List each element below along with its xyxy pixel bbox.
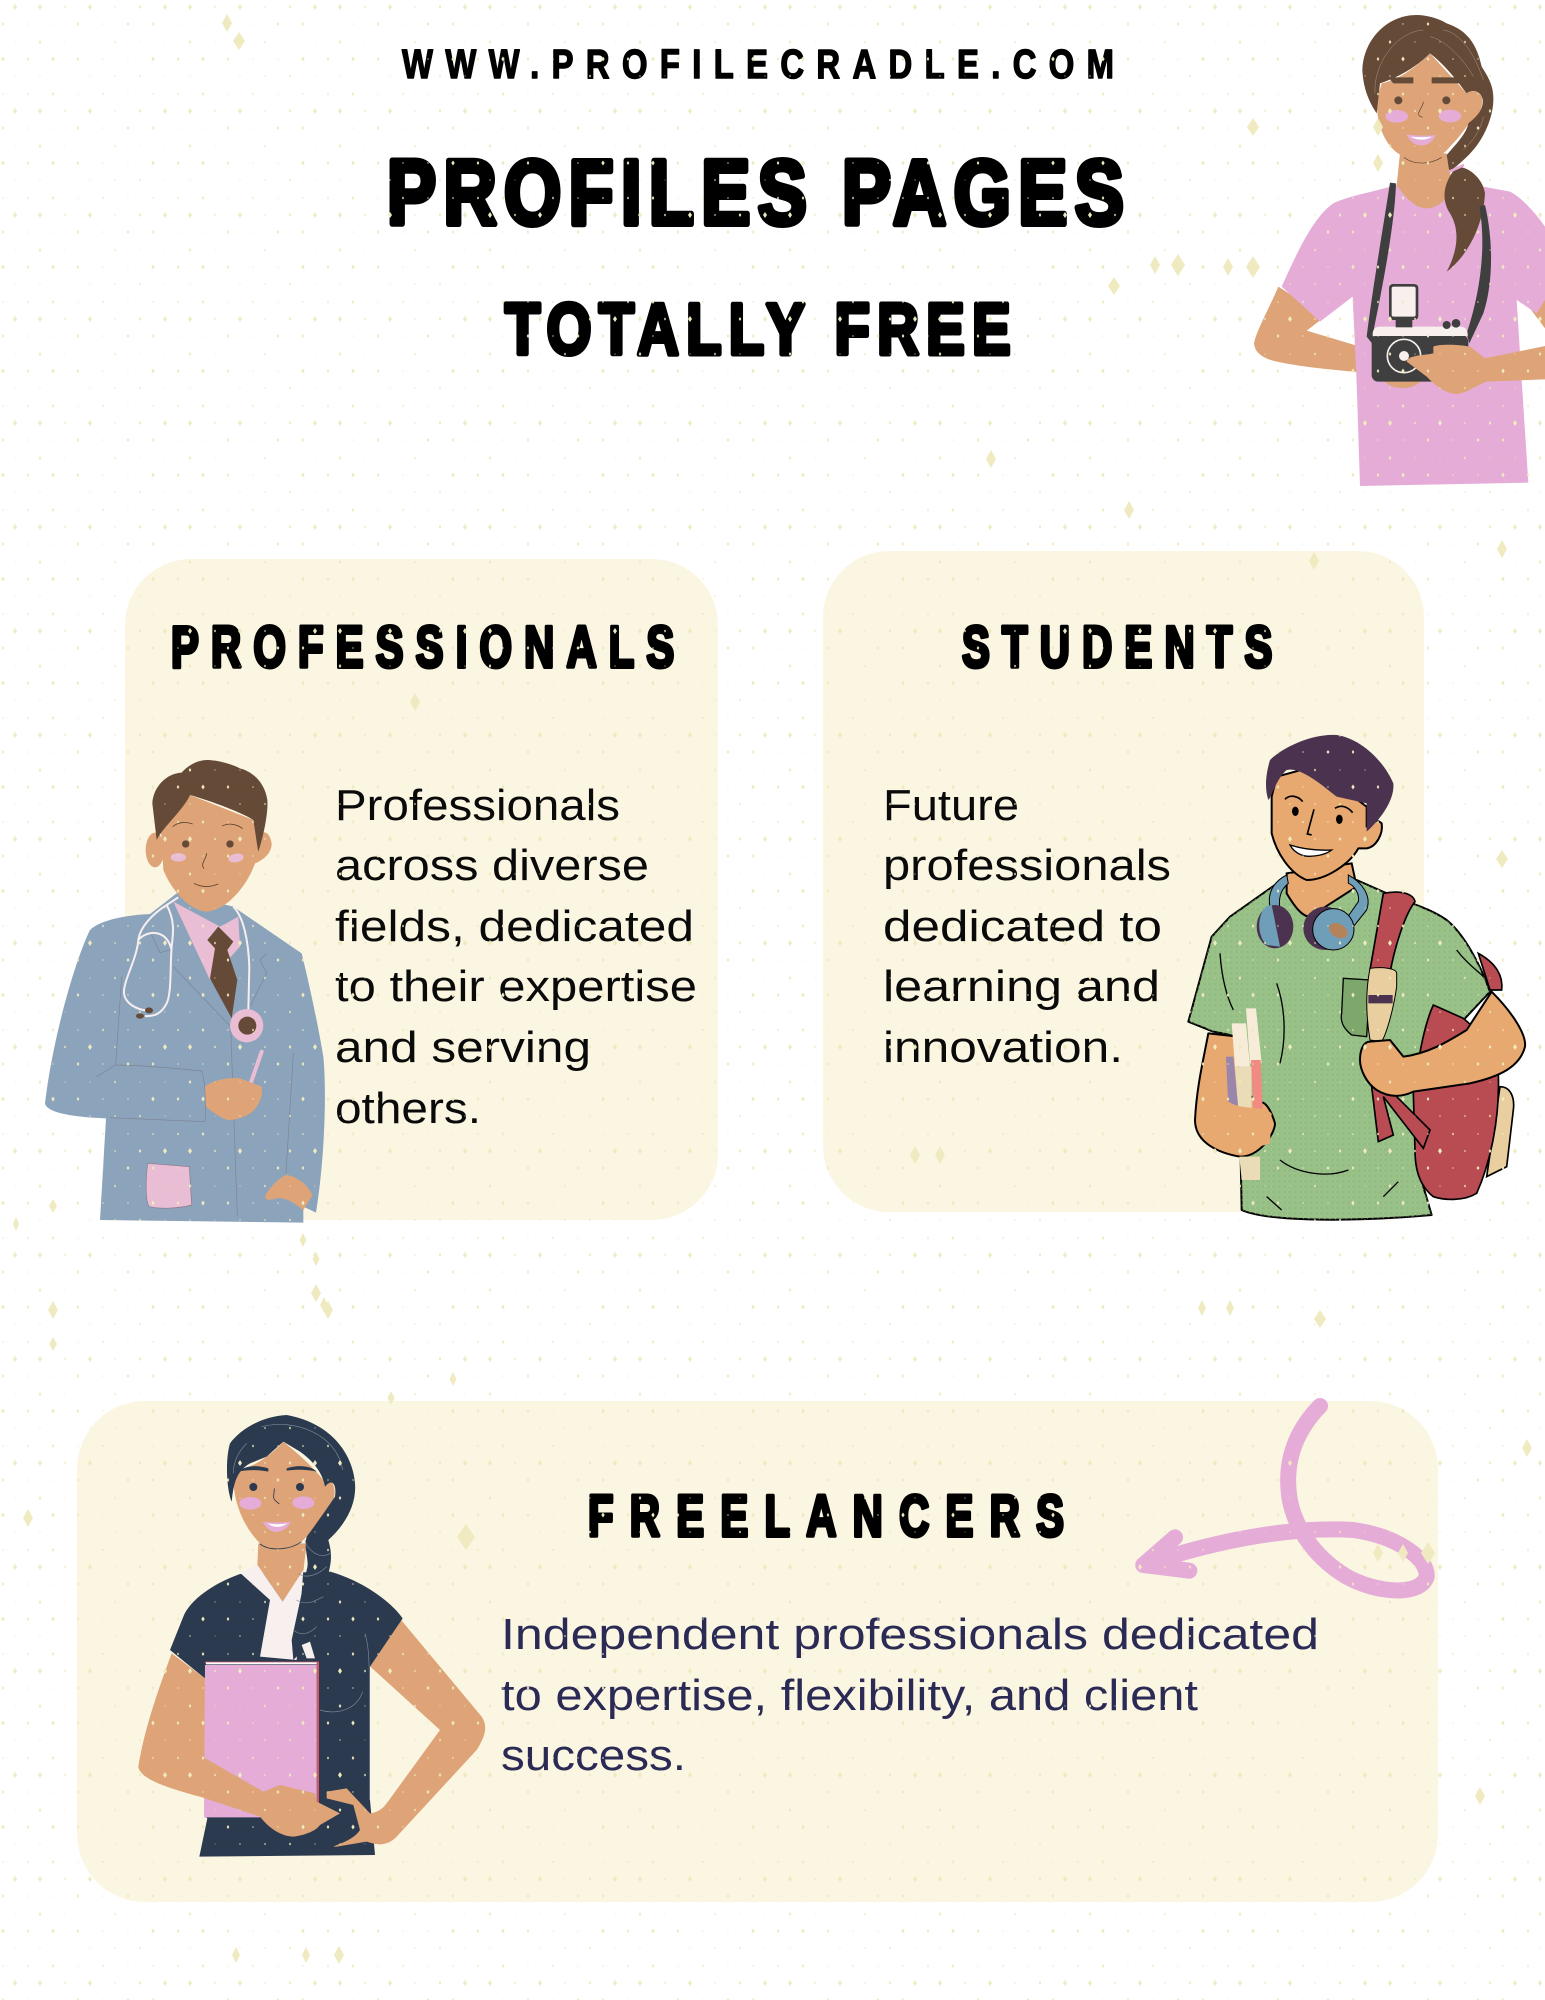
subtitle: TOTALLY FREE — [505, 289, 1011, 369]
arrow: pink looped arrow — [1143, 1406, 1427, 1590]
text: freelancers description — [501, 1610, 1319, 1780]
text: professionals description: to their expertise — [335, 962, 697, 1011]
text: freelancers description: success. — [501, 1731, 686, 1780]
panel: professionals card — [125, 559, 718, 1220]
text: students description: Future — [883, 781, 1019, 830]
text: students description: innovation. — [883, 1023, 1123, 1072]
title: PROFILES PAGES — [387, 141, 1124, 244]
text: students description: learning and — [883, 962, 1160, 1011]
heading: freelancers: FREELANCERS — [588, 1483, 1064, 1549]
text: professionals description: and serving — [335, 1023, 591, 1072]
text: students description — [883, 781, 1171, 1072]
text: professionals description: across diverse — [335, 841, 649, 890]
text: freelancers description: to expertise, flexibility, and client — [501, 1671, 1198, 1720]
text: students description: dedicated to — [883, 902, 1162, 951]
illustration: freelancer holding a book — [138, 1415, 485, 1857]
text: professionals description: fields, dedicated — [335, 902, 694, 951]
text: professionals description: others. — [335, 1084, 481, 1133]
heading: students: STUDENTS — [962, 614, 1272, 680]
illustration: student with backpack — [1188, 735, 1525, 1220]
text: professionals description — [335, 781, 697, 1133]
text: freelancers description: Independent professionals dedicated — [501, 1610, 1319, 1659]
panel: freelancers card — [77, 1401, 1438, 1902]
illustration: photographer with camera — [1254, 15, 1545, 486]
text: students description: professionals — [883, 841, 1171, 890]
panel: students card — [823, 551, 1424, 1212]
website address: WWW.PROFILECRADLE.COM — [402, 40, 1114, 87]
heading: professionals: PROFESSIONALS — [171, 614, 674, 680]
illustration: doctor with stethoscope — [45, 760, 325, 1223]
text: professionals description: Professionals — [335, 781, 620, 830]
